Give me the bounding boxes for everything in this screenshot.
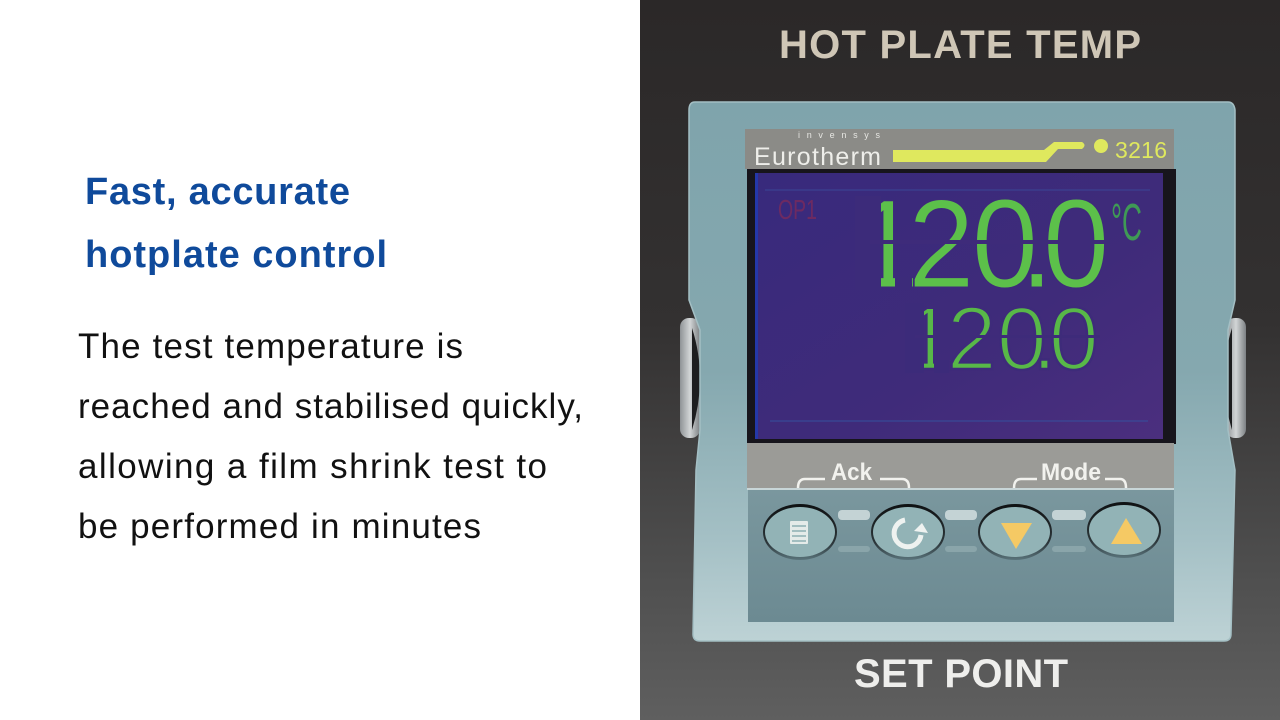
key legend strip (747, 443, 1174, 488)
label: set point: SET POINT (854, 652, 1068, 696)
button: down (978, 504, 1052, 560)
panel: text column (0, 0, 640, 720)
keypad panel (747, 488, 1174, 622)
parent brand: invensys (798, 130, 880, 140)
main reading: 120.0 (853, 174, 1109, 314)
controller bezel (689, 102, 1235, 641)
model number: 3216 (1115, 137, 1167, 163)
button: up (1087, 502, 1161, 558)
body text: The test temperature is (78, 327, 463, 366)
panel: controller photo (640, 0, 1280, 720)
button: scroll (871, 504, 945, 560)
unit: °C (1111, 194, 1142, 252)
output indicator: OP1 (778, 194, 817, 225)
label: hot plate temp: HOT PLATE TEMP (779, 23, 1141, 67)
yellow dot (1094, 139, 1108, 153)
set point reading: 120.0 (904, 288, 1098, 388)
right side clip (1224, 318, 1246, 438)
button: page (763, 504, 837, 560)
body text (78, 327, 583, 546)
body text: allowing a film shrink test to (78, 447, 547, 486)
body text: reached and stabilised quickly, (78, 387, 583, 426)
brand name: Eurotherm (754, 143, 881, 171)
brand strip (745, 129, 1174, 171)
yellow swoosh (893, 142, 1084, 162)
body text: be performed in minutes (78, 507, 481, 546)
heading: hotplate control (85, 234, 387, 276)
LCD display (747, 169, 1176, 444)
mode label: Mode (1041, 459, 1101, 486)
ack label: Ack (831, 459, 873, 486)
left side clip (680, 318, 700, 438)
heading: Fast, accurate (85, 171, 350, 213)
legend brackets (798, 479, 1126, 488)
heading (85, 171, 387, 276)
